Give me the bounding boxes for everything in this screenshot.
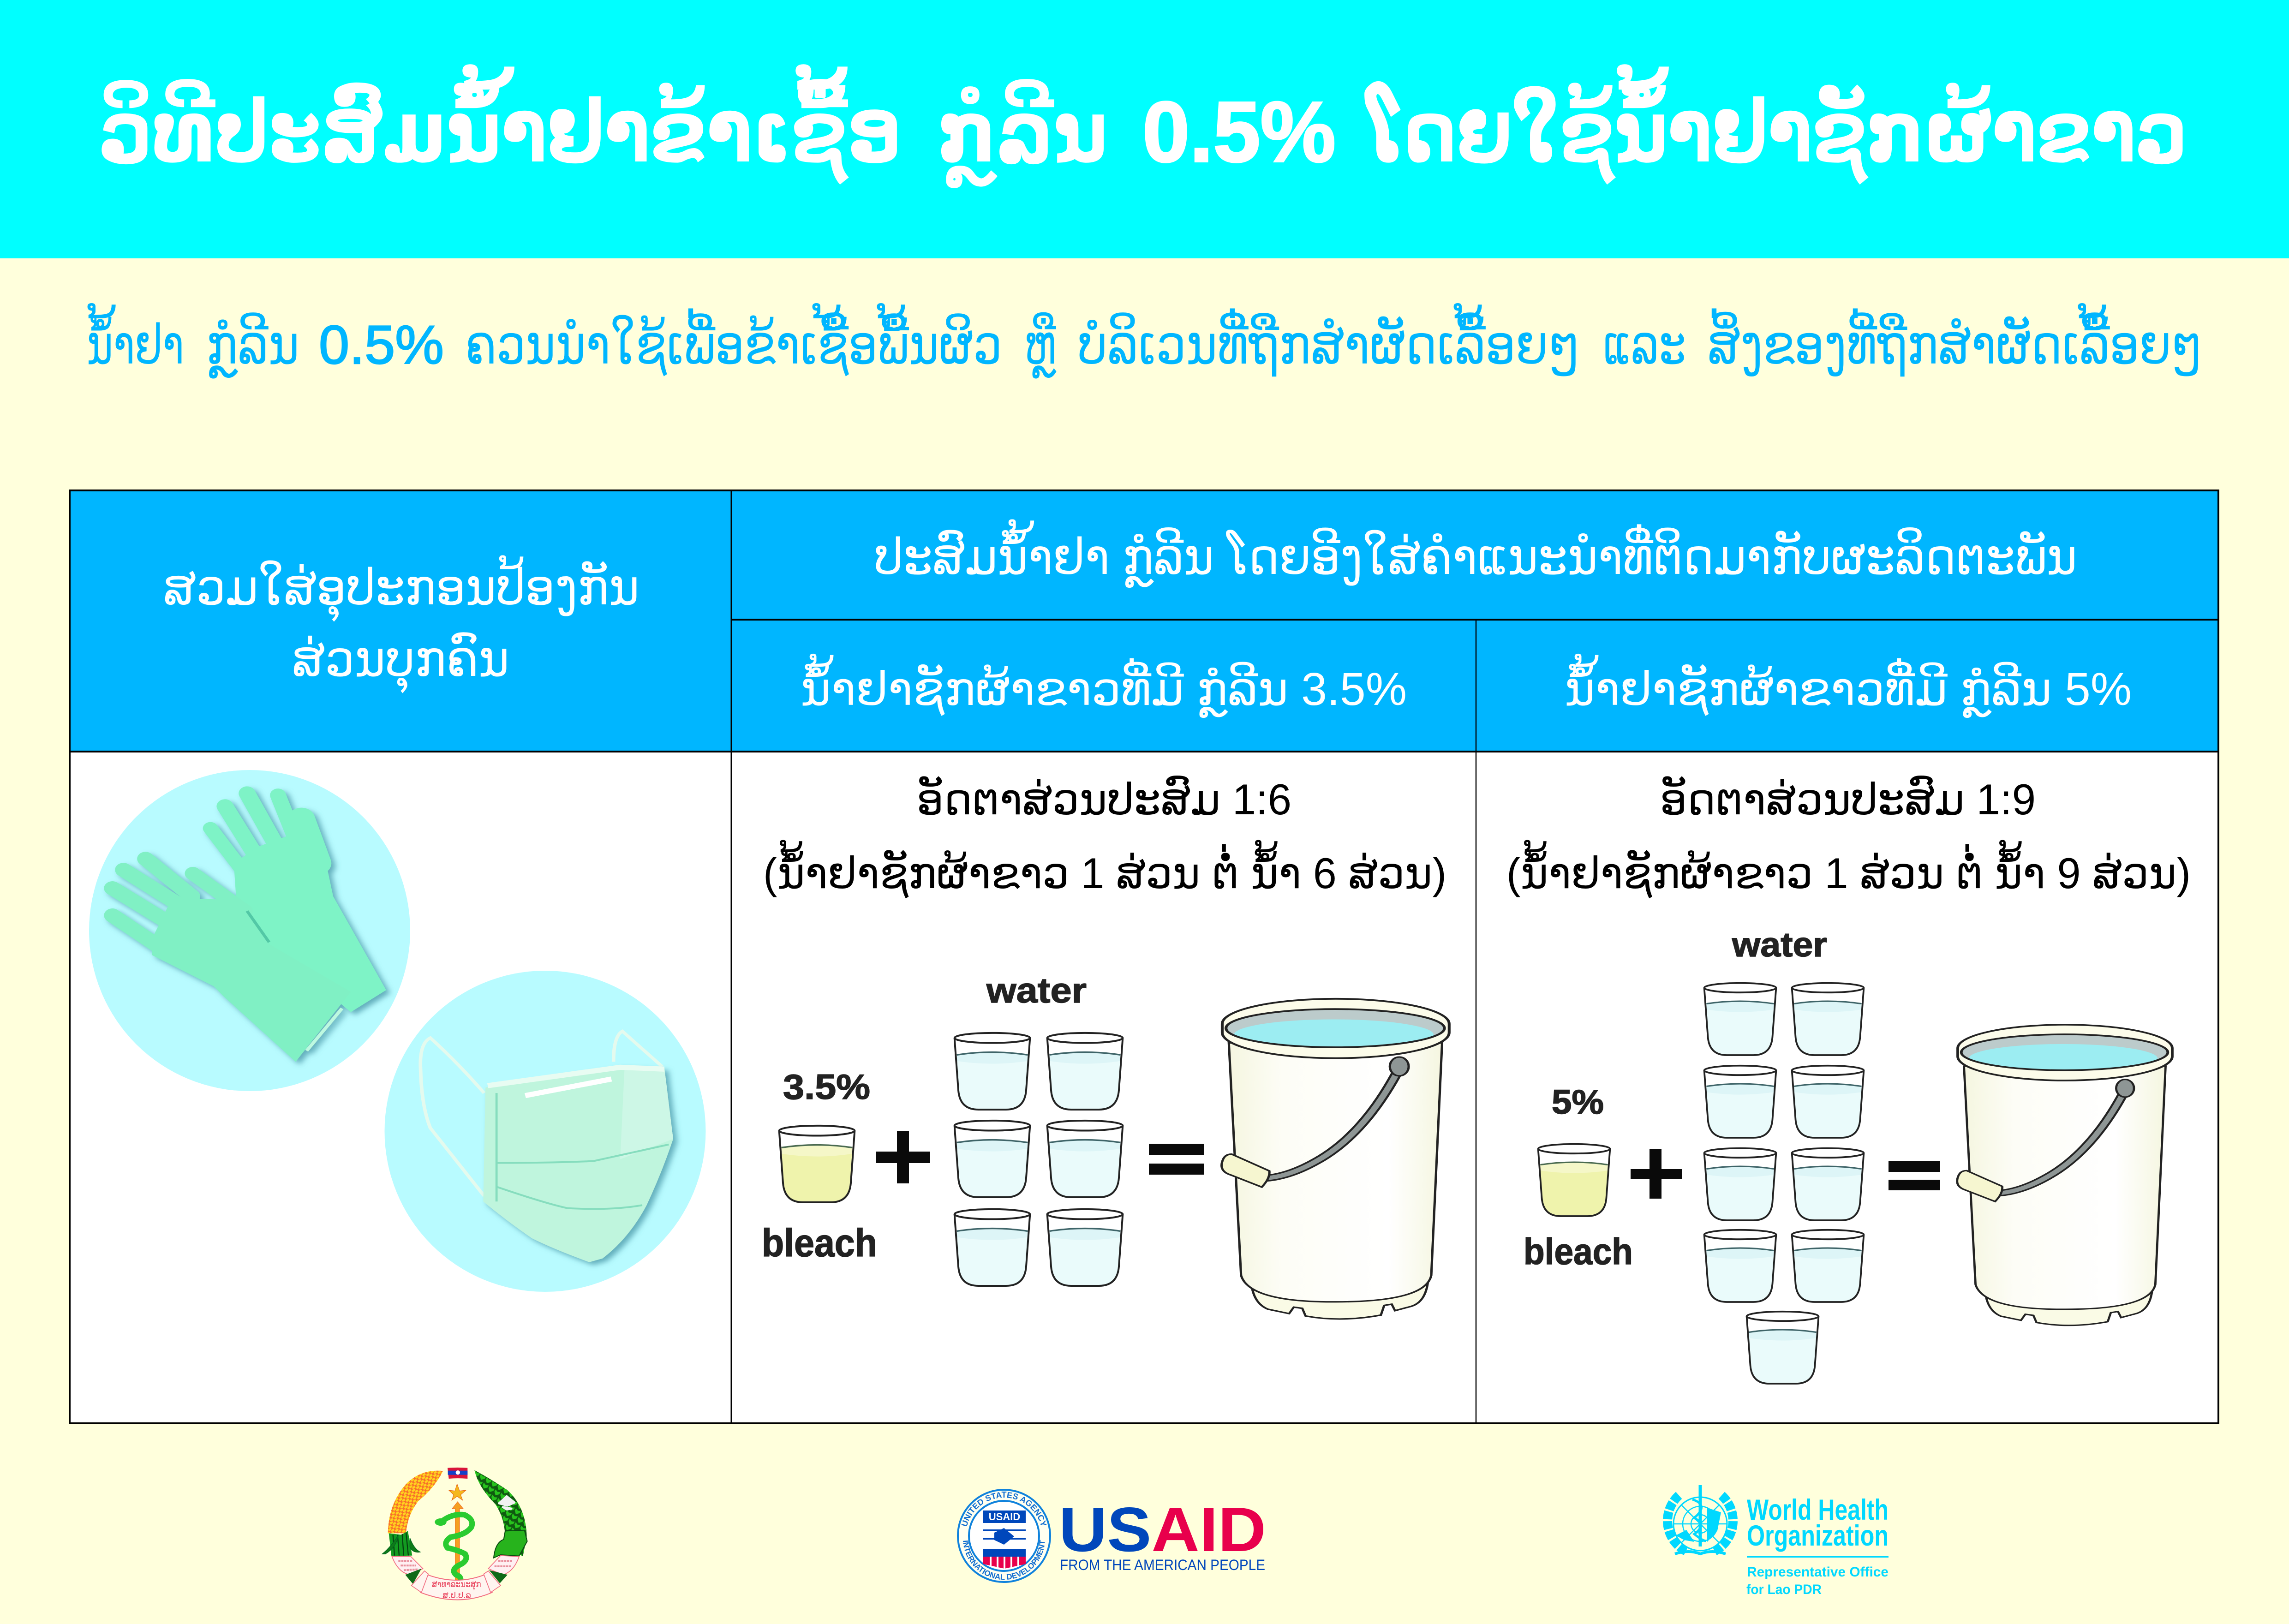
icon: equals bbox=[1889, 1161, 1940, 1190]
subtitle: ້ bbox=[1453, 303, 1484, 364]
header: personal protective equipment: ສ່ວນບຸກຄົນ bbox=[292, 631, 509, 693]
WHO rule bbox=[1747, 1556, 1889, 1558]
WHO name: Organization bbox=[1747, 1520, 1889, 1552]
subtitle: ກຼໍລີນ bbox=[206, 312, 299, 379]
USAID seal: INTERNATIONAL DEVELOPMENT bbox=[961, 1540, 1047, 1582]
WHO name bbox=[1747, 1494, 1889, 1552]
subtitle: ່ bbox=[688, 303, 708, 364]
USAID seal: UNITED STATES AGENCY bbox=[960, 1490, 1048, 1528]
subtitle: ສິ່ງຂອງທີ່ຖືກສໍາຜັດເລື້ອຍໆ bbox=[1708, 311, 2203, 377]
ratio 1:6 text: ອັດຕາສ່ວນປະສົມ 1:6 bbox=[917, 775, 1291, 824]
subtitle bbox=[87, 303, 2203, 379]
logo: USAID bbox=[958, 1490, 1266, 1582]
icon: bleach cup bbox=[779, 1126, 855, 1202]
title: 0.5% bbox=[1142, 84, 1336, 180]
title: ກຼໍລີນ bbox=[938, 78, 1107, 188]
header: 5% bleach: ້ bbox=[1574, 653, 1601, 705]
green sheaf bbox=[474, 1470, 527, 1556]
label: 5%: 5% bbox=[1552, 1083, 1604, 1121]
ratio 1:6 text: ້ bbox=[1255, 839, 1279, 888]
header: mix according to product instructions: ່ bbox=[1637, 519, 1655, 574]
table header background bbox=[70, 490, 2218, 752]
staff bbox=[452, 1502, 463, 1581]
flag bbox=[448, 1468, 467, 1479]
label: water: water bbox=[1732, 925, 1827, 964]
USAID tagline: FROM THE AMERICAN PEOPLE bbox=[1060, 1557, 1265, 1573]
USAID wordmark: USAID bbox=[1059, 1494, 1266, 1564]
USAID seal: USAID bbox=[989, 1511, 1020, 1522]
icon: plus bbox=[1631, 1149, 1682, 1199]
icon: surgical mask bbox=[385, 971, 706, 1292]
ratio 1:6 text: ່ bbox=[1222, 839, 1238, 888]
subtitle: ຄວນນໍາໃຊ້ເພື່ອຂ້າເຊື້ອພື້ນຜິວ bbox=[465, 312, 1002, 376]
label: 3.5%: 3.5% bbox=[783, 1068, 870, 1107]
logo: World Health Organization bbox=[1667, 1485, 1889, 1597]
star bbox=[449, 1484, 466, 1500]
icon: six water cups bbox=[955, 1033, 1123, 1286]
subtitle: 0.5% bbox=[319, 315, 444, 376]
subtitle: ບໍລິເວນທີ່ຖືກສໍາຜັດເລື້ອຍໆ bbox=[1078, 312, 1580, 377]
icon: bucket bbox=[1222, 999, 1449, 1319]
icon: rubber gloves bbox=[89, 770, 410, 1091]
WHO office: Representative Office bbox=[1747, 1564, 1889, 1580]
subtitle: ແລະ bbox=[1603, 315, 1686, 376]
ratio 1:6 text: ້ bbox=[780, 839, 804, 888]
ratio 1:9 text bbox=[1506, 775, 2191, 899]
header: personal protective equipment bbox=[163, 555, 639, 693]
label: water: water bbox=[986, 971, 1087, 1010]
header: 3.5% bleach: ນໍ້າຢາຊັກຜ້າຂາວທີ່ມີ ກຼໍລີນ 3.5% bbox=[801, 662, 1407, 718]
ratio 1:6 text: (ນໍ້າຢາຊັກຜ້າຂາວ 1 ສ່ວນ ຕໍ່ ນໍ້າ 6 ສ່ວນ) bbox=[763, 849, 1446, 899]
header: 3.5% bleach: ່ bbox=[1130, 653, 1147, 705]
WHO office bbox=[1746, 1564, 1889, 1597]
WHO office: for Lao PDR bbox=[1746, 1582, 1822, 1597]
icon: bleach cup bbox=[1538, 1144, 1610, 1216]
table panel bbox=[70, 490, 2218, 1423]
ribbons bbox=[392, 1556, 423, 1575]
subtitle: ່ bbox=[1711, 303, 1732, 364]
title banner bbox=[0, 0, 2289, 258]
diagram: 1:6 mix bbox=[762, 971, 1449, 1319]
ratio 1:9 text: ່ bbox=[1965, 839, 1981, 888]
WHO name: World Health bbox=[1747, 1494, 1889, 1526]
header: mix according to product instructions: ້ bbox=[1008, 519, 1036, 574]
front glove bbox=[113, 859, 351, 1062]
subtitle: ້ bbox=[812, 303, 843, 364]
logo: Lao Ministry of Health: ສ.ປ.ປ.ລ bbox=[442, 1590, 471, 1600]
logo: Lao Ministry of Health bbox=[382, 1468, 527, 1600]
header: mix according to product instructions: ປະສົມນໍ້າຢາ ກຼໍລີນ ໂດຍອີງໃສ່ຄໍາແນະນໍາທີ່ຕິດມາກັບຜະລິດຕະພັນ bbox=[874, 528, 2077, 588]
rice sheaf bbox=[388, 1471, 443, 1533]
header: 3.5% bleach: ້ bbox=[809, 653, 836, 705]
icon: bucket bbox=[1957, 1025, 2172, 1325]
ratio 1:9 text: (ນໍ້າຢາຊັກຜ້າຂາວ 1 ສ່ວນ ຕໍ່ ນໍ້າ 9 ສ່ວນ) bbox=[1506, 849, 2191, 899]
icon: plus bbox=[876, 1131, 930, 1183]
banner text: ສາທາລະນະສຸກ bbox=[432, 1580, 481, 1590]
ratio 1:9 text: ້ bbox=[1999, 839, 2024, 888]
header: 5% bleach: ນໍ້າຢາຊັກຜ້າຂາວທີ່ມີ ກຼໍລີນ 5% bbox=[1565, 662, 2132, 718]
USAID seal bbox=[958, 1490, 1050, 1582]
subtitle: ້ bbox=[2078, 303, 2109, 364]
subtitle: ຫຼື bbox=[1024, 312, 1057, 379]
back glove bbox=[210, 794, 386, 1012]
subtitle: ນໍ້າຢາ bbox=[87, 315, 184, 376]
snake bbox=[442, 1515, 472, 1581]
subtitle: ້ bbox=[87, 303, 118, 364]
label: bleach: bleach bbox=[762, 1221, 877, 1265]
label: bleach: bleach bbox=[1524, 1231, 1633, 1272]
header: personal protective equipment: ສວມໃສ່ອຸປະກອນປ້ອງກັນ bbox=[163, 555, 639, 622]
icon: equals bbox=[1149, 1144, 1204, 1175]
title: ້ bbox=[795, 64, 849, 161]
diagram: 1:9 mix bbox=[1524, 925, 2172, 1384]
table body background bbox=[70, 752, 2218, 1423]
title bbox=[99, 64, 2188, 188]
ratio 1:6 text bbox=[763, 775, 1446, 899]
ratio 1:9 text: ອັດຕາສ່ວນປະສົມ 1:9 bbox=[1660, 775, 2036, 824]
WHO emblem bbox=[1667, 1485, 1733, 1554]
subtitle: ່ bbox=[1853, 303, 1873, 364]
title: ວິທີປະສົມນໍ້າຢາຂ້າເຊື້ອ bbox=[99, 78, 902, 185]
title: ້ bbox=[462, 64, 516, 161]
subtitle: ່ bbox=[1230, 303, 1250, 364]
header: 5% bleach: ່ bbox=[1897, 653, 1914, 705]
title: ້ bbox=[1617, 64, 1671, 161]
subtitle: ້ bbox=[877, 303, 908, 364]
ratio 1:9 text: ້ bbox=[1524, 839, 1548, 888]
icon: nine water cups bbox=[1704, 983, 1864, 1384]
